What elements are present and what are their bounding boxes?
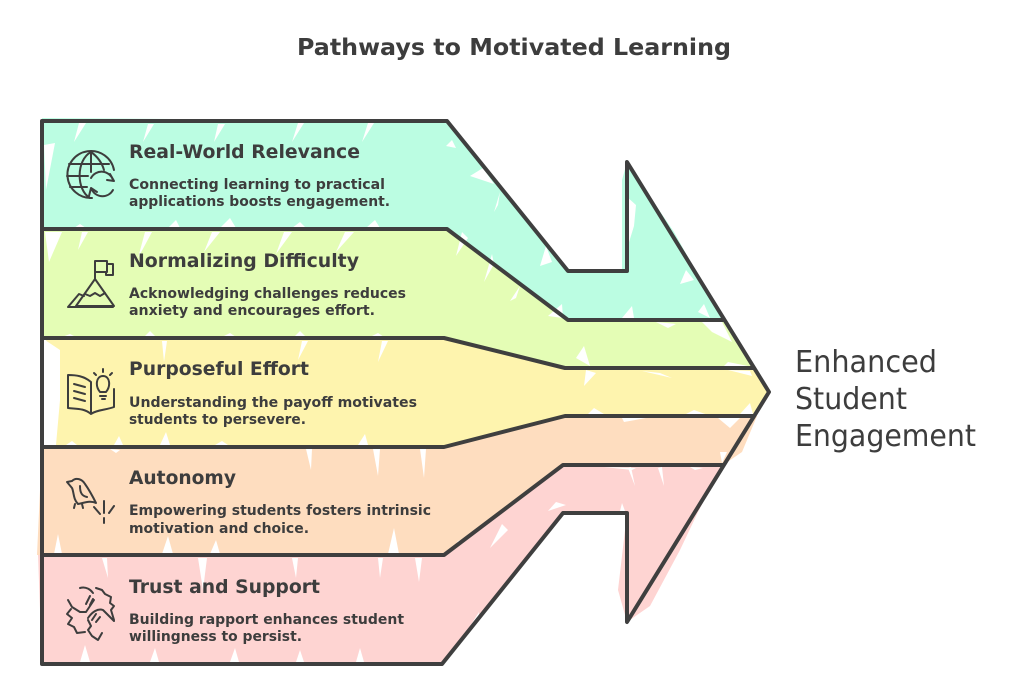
arrow diagram: [37, 118, 769, 664]
icon: clasped hands: [67, 587, 114, 640]
band fill: pink: [38, 465, 723, 664]
band fill: teal: [42, 118, 723, 320]
heading: Purposeful Effort: [129, 358, 309, 380]
description: [129, 503, 431, 537]
description: motivation and choice.: [129, 521, 309, 537]
band fill: peach: [37, 416, 757, 555]
icon: bird with sparkle: [67, 479, 114, 523]
icon: open book with light bulb: [68, 369, 114, 414]
arrow tip label: [795, 345, 976, 454]
description: Building rapport enhances student: [129, 612, 404, 628]
description: [129, 286, 406, 319]
description: [129, 177, 390, 210]
heading: Normalizing Difficulty: [129, 250, 360, 272]
arrow tip label: Student: [795, 382, 907, 417]
description: Understanding the payoff motivates: [129, 395, 417, 411]
description: Acknowledging challenges reduces: [129, 286, 406, 302]
description: [129, 612, 404, 645]
item: Normalizing Difficulty: [68, 250, 406, 319]
band fill: lime: [42, 229, 753, 368]
item: Autonomy: [67, 467, 431, 537]
item: Real-World Relevance: [67, 141, 390, 210]
arrow tip label: Enhanced: [795, 345, 937, 380]
item: Trust and Support: [67, 576, 404, 645]
description: Connecting learning to practical: [129, 177, 385, 193]
description: applications boosts engagement.: [129, 194, 390, 210]
description: [129, 395, 417, 428]
description: anxiety and encourages effort.: [129, 303, 375, 319]
description: students to persevere.: [129, 412, 306, 428]
heading: Real-World Relevance: [129, 141, 360, 163]
white hatch gaps: [44, 123, 753, 662]
icon: mountain with flag: [68, 261, 114, 307]
divider outlines: [42, 229, 723, 320]
title: Pathways to Motivated Learning: [297, 35, 731, 61]
heading: Autonomy: [129, 467, 237, 489]
icon: globe with refresh arrows: [67, 151, 114, 198]
arrow outline: [42, 121, 769, 664]
description: Empowering students fosters intrinsic: [129, 503, 431, 519]
item: Purposeful Effort: [68, 358, 417, 428]
band fill: yellow: [46, 338, 769, 447]
arrow tip label: Engagement: [795, 419, 976, 454]
heading: Trust and Support: [129, 576, 320, 598]
description: willingness to persist.: [129, 629, 302, 645]
